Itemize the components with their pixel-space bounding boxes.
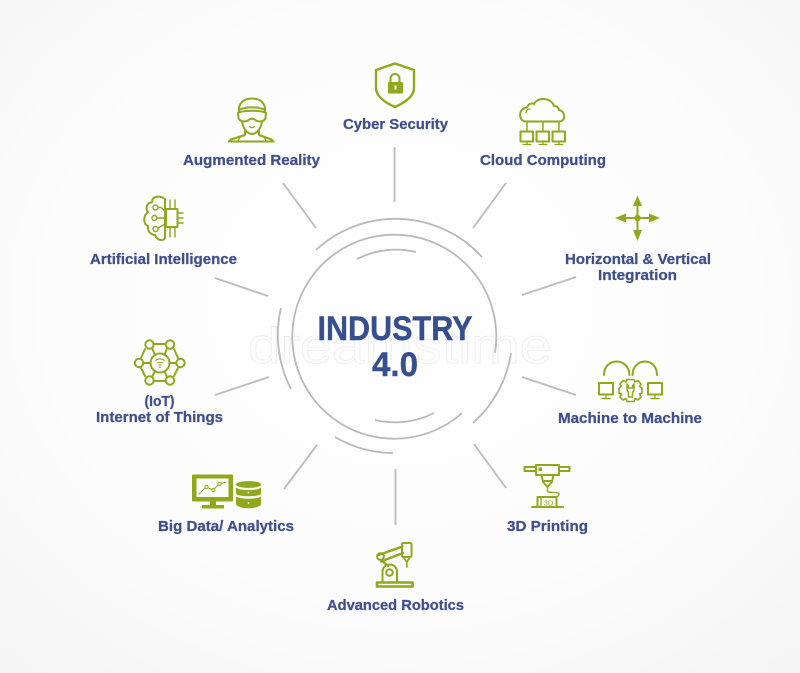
label: Horizontal & Vertical <box>565 252 711 268</box>
title: Industry 4.0: 4.0 <box>372 346 418 384</box>
icon: half brain half chip <box>144 197 183 240</box>
label: Augmented Reality <box>183 153 320 169</box>
title: Industry 4.0 <box>318 310 472 384</box>
item: Artificial Intelligence <box>90 197 237 268</box>
central hub rings <box>278 219 511 453</box>
item: Internet of Things <box>96 340 223 426</box>
item: Big Data / Analytics <box>158 474 294 535</box>
label: Cloud Computing <box>480 153 606 169</box>
item: Augmented Reality <box>183 98 320 169</box>
label: (IoT) <box>144 394 175 410</box>
item: Advanced Robotics <box>327 543 464 614</box>
icon: cloud linked to three monitors <box>520 99 565 144</box>
icon: 3D printer: 3D <box>544 498 554 508</box>
label: Integration <box>598 268 677 284</box>
label <box>96 394 223 426</box>
item: Cyber Security <box>343 64 448 133</box>
watermark: dreamstime <box>248 318 552 374</box>
label: Big Data/ Analytics <box>158 519 294 535</box>
icon: robotic arm <box>377 543 412 586</box>
icon: person wearing AR goggles <box>229 98 274 142</box>
label: Machine to Machine <box>558 411 702 427</box>
icon: hexagonal network with wifi hub <box>135 340 185 385</box>
label: Cyber Security <box>343 117 448 133</box>
icon: four-way arrows <box>615 196 660 241</box>
label: 3D Printing <box>507 519 588 535</box>
icon: monitor chart and database <box>192 474 261 508</box>
title: Industry 4.0: INDUSTRY <box>318 310 472 348</box>
item: 3D Printing <box>507 465 588 535</box>
icon: shield with padlock <box>376 64 414 107</box>
label: Advanced Robotics <box>327 598 464 614</box>
item: Cloud Computing <box>480 99 606 169</box>
item: Machine to Machine <box>558 362 702 427</box>
radial connector lines <box>215 147 576 525</box>
label: Artificial Intelligence <box>90 252 237 268</box>
label: Internet of Things <box>96 410 223 426</box>
icon: two monitors linked by a gear <box>599 362 662 402</box>
item: Horizontal & Vertical Integration <box>565 196 711 284</box>
label <box>565 252 711 284</box>
